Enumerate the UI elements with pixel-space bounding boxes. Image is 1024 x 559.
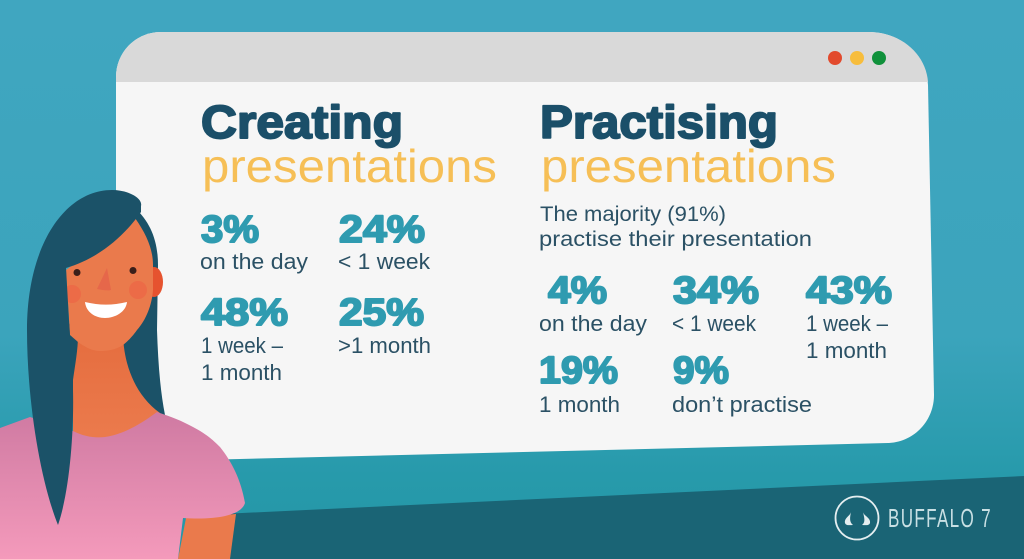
stat: 43% 1 week to 1 month: 1 week – — [806, 311, 888, 336]
stat: 25% over 1 month: >1 month — [338, 333, 431, 358]
stat: 34% under 1 week: < 1 week — [672, 311, 757, 336]
stat: 24% under 1 week: 24% — [339, 209, 425, 251]
stat: 24% under 1 week: < 1 week — [338, 249, 431, 274]
stat: 4% on the day — [539, 270, 648, 336]
heading: practising presentations — [540, 96, 836, 192]
stat: 9% don't practise: 9% — [673, 350, 729, 392]
heading: practising presentations: Practising — [540, 96, 778, 148]
heading: practising presentations: presentations — [541, 140, 836, 192]
stat: 43% 1 week to 1 month — [806, 270, 892, 363]
stat: 48% 1 week to 1 month — [201, 292, 288, 385]
stat: 48% 1 week to 1 month: 1 month — [201, 360, 282, 385]
stat: 43% 1 week to 1 month: 1 month — [806, 338, 887, 363]
stat: 25% over 1 month: 25% — [339, 292, 424, 334]
stat: 9% don't practise: don’t practise — [672, 392, 812, 417]
dark floor band — [200, 476, 1024, 559]
window buttons — [828, 51, 886, 65]
stat: 24% under 1 week — [338, 209, 431, 274]
text: majority practise — [539, 203, 812, 251]
browser window panel — [116, 32, 934, 462]
stat: 3% on the day: on the day — [200, 249, 309, 274]
heading: creating presentations — [201, 96, 497, 192]
stat: 48% 1 week to 1 month: 1 week – — [201, 333, 283, 358]
stat: 3% on the day: 3% — [201, 209, 259, 251]
illustration: smiling woman — [0, 190, 245, 559]
stat: 4% on the day: 4% — [548, 270, 607, 312]
heading: creating presentations: presentations — [202, 140, 497, 192]
stat: 19% 1 month: 1 month — [539, 392, 620, 417]
stat: 3% on the day — [200, 209, 309, 274]
stat: 34% under 1 week — [672, 270, 759, 336]
stat: 4% on the day: on the day — [539, 311, 648, 336]
logo: buffalo 7 — [836, 496, 992, 540]
browser title bar — [116, 32, 928, 82]
stat: 48% 1 week to 1 month: 48% — [201, 292, 288, 334]
stat: 43% 1 week to 1 month: 43% — [806, 270, 892, 312]
stat: 9% don't practise — [672, 350, 812, 417]
heading: creating presentations: Creating — [201, 96, 403, 148]
stat: 25% over 1 month — [338, 292, 431, 358]
stat: 34% under 1 week: 34% — [673, 270, 759, 312]
stat: 19% 1 month — [539, 350, 620, 417]
text: majority practise: The majority (91%) — [540, 203, 726, 226]
text: majority practise: practise their presentation — [539, 228, 812, 251]
stat: 19% 1 month: 19% — [539, 350, 618, 392]
